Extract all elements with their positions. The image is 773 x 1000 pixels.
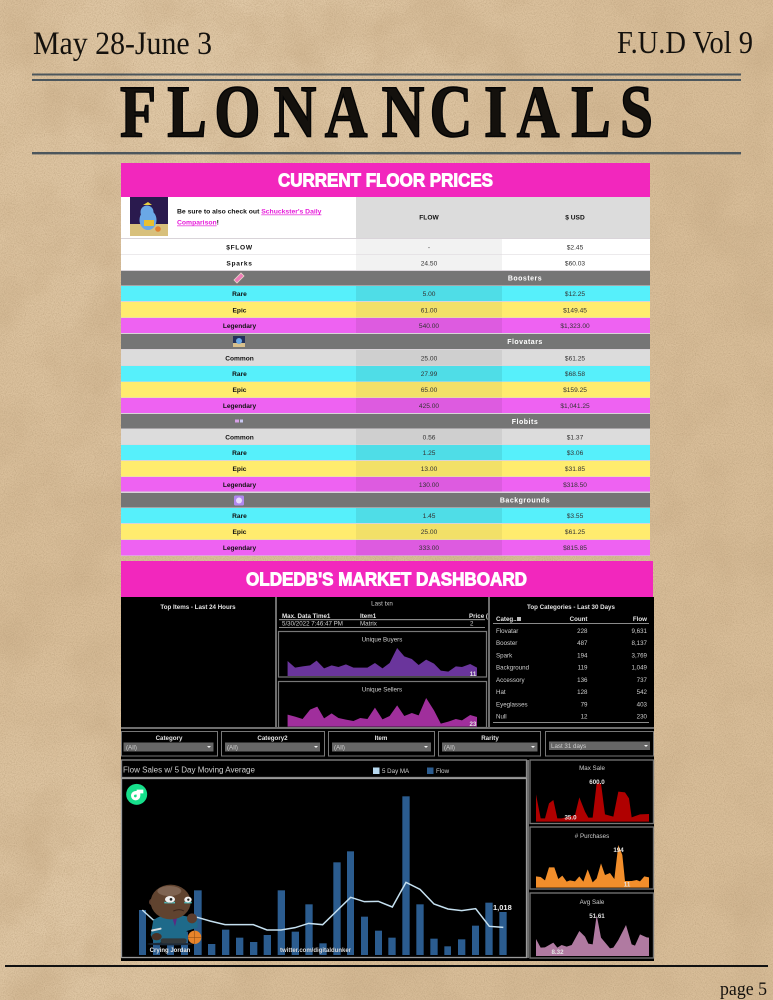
row: sparks: $60.03 — [565, 260, 585, 268]
chart: unique buyers: 11 — [470, 671, 477, 678]
intro row with avatar and note: Comparison! — [177, 220, 219, 226]
row: background rare — [121, 508, 650, 523]
intro row with avatar and note: FLOW — [419, 214, 439, 222]
row: flobit legendary: Legendary — [223, 482, 256, 489]
chart: flow sales with moving average — [122, 760, 526, 958]
table: top categories: Top Categories - Last 30 Days — [527, 604, 616, 611]
table: top categories: 542 — [637, 689, 648, 696]
chart: average sale: 8.32 — [551, 949, 564, 956]
filter: item — [328, 732, 434, 756]
row: background epic — [121, 524, 650, 540]
icon: crying jordan character — [147, 885, 201, 945]
row: booster epic: $149.45 — [563, 308, 587, 314]
filter: category: (All) — [126, 744, 137, 752]
chart: unique sellers — [278, 682, 486, 728]
filter: rarity — [438, 732, 540, 756]
row: booster epic: 61.00 — [421, 308, 438, 314]
section: boosters: Boosters — [508, 276, 542, 282]
intro row with avatar and note — [121, 197, 650, 238]
table: top categories: 194 — [577, 652, 588, 660]
row: sparks — [121, 255, 650, 270]
heading: market dashboard — [121, 561, 653, 597]
row: flovatar legendary — [121, 398, 650, 413]
filter: category — [122, 732, 218, 756]
row: booster legendary: 540.00 — [419, 323, 439, 330]
section: backgrounds: Backgrounds — [500, 498, 550, 504]
table: top categories: 8,137 — [632, 640, 648, 647]
table: top categories: 3,769 — [632, 652, 648, 660]
row: flovatar epic: 65.00 — [421, 387, 438, 394]
filter: rarity: (All) — [444, 744, 455, 752]
chart: unique sellers: Unique Sellers — [362, 686, 402, 694]
row: flobit legendary — [121, 477, 650, 492]
chart: purchases: 194 — [613, 847, 624, 854]
row: flobit legendary: 130.00 — [419, 482, 439, 489]
chart: average sale: Avg Sale — [580, 899, 605, 906]
row: flovatar common: 25.00 — [421, 356, 438, 362]
panel: last transaction: 2 — [470, 620, 474, 628]
row: booster rare: 5.00 — [423, 291, 436, 298]
table: top categories: Count — [570, 616, 588, 623]
row: flobit epic: $31.85 — [565, 466, 585, 473]
table: top categories: 12 — [581, 714, 588, 720]
masthead bottom rule — [32, 152, 741, 154]
chart: flow sales with moving average: Flow Sales w/ 5 Day Moving Average — [123, 766, 255, 774]
filter: date range: Last 31 days — [551, 743, 586, 750]
panel: top items: Top Items - Last 24 Hours — [160, 604, 236, 611]
row: background rare: 1.45 — [423, 513, 436, 520]
row: flovatar legendary: Legendary — [223, 403, 256, 410]
panel: last transaction: Item1 — [360, 613, 377, 620]
icon: flovatar avatar — [130, 197, 168, 236]
row: booster rare: $12.25 — [565, 291, 585, 298]
row: flobit rare: Rare — [232, 450, 247, 457]
chart: purchases: 11 — [624, 882, 631, 888]
bars — [139, 796, 507, 955]
table: top categories: Booster — [496, 640, 517, 647]
masthead volume: F.U.D Vol 9 — [617, 24, 753, 60]
table: top categories: 230 — [637, 714, 648, 720]
filter: item: Item — [375, 735, 388, 742]
row: flovatar rare: 27.99 — [421, 371, 438, 378]
row: background rare: $3.55 — [567, 513, 584, 520]
chart caption: twitter handle: twitter.com/digitaldunker — [280, 948, 352, 954]
filter: category2: Category2 — [257, 735, 288, 742]
row: flobit epic — [121, 461, 650, 476]
row: flobit common: 0.56 — [423, 434, 436, 442]
row: flovatar rare — [121, 366, 650, 382]
row: background legendary: $815.85 — [563, 545, 587, 552]
row: flobit rare: 1.25 — [423, 450, 436, 457]
chart: average sale — [530, 893, 654, 958]
section: flovatars — [121, 334, 650, 349]
masthead top double rule — [32, 74, 741, 81]
table: top categories: 1,049 — [632, 664, 648, 672]
legend — [373, 768, 450, 775]
chart: unique sellers: 23 — [470, 721, 477, 728]
row: flobit epic: Epic — [233, 466, 247, 473]
row: sparks: Sparks — [226, 260, 253, 268]
row: background legendary: 333.00 — [419, 545, 439, 552]
panel: last transaction: Matrix — [360, 620, 378, 628]
row: flow token: - — [428, 244, 430, 252]
intro row with avatar and note: Be sure to also check out Schuckster's Daily — [177, 208, 322, 216]
row: flovatar common: Common — [225, 356, 254, 362]
moving average line — [142, 882, 503, 930]
table: top categories: 79 — [581, 702, 588, 708]
filter: rarity: Rarity — [481, 735, 499, 742]
chart: unique buyers: Unique Buyers — [362, 636, 402, 644]
row: booster epic: Epic — [233, 308, 247, 314]
row: sparks: 24.50 — [421, 260, 438, 268]
row: flovatar rare: $68.58 — [565, 371, 585, 378]
filter: category2 — [222, 732, 324, 756]
row: background epic: Epic — [233, 529, 247, 536]
row: background legendary — [121, 540, 650, 556]
footer rule — [5, 965, 768, 967]
panel: market dashboard — [121, 597, 654, 961]
table: top categories: 119 — [578, 664, 588, 672]
chart caption: crying jordan: Crying Jordan — [150, 948, 191, 954]
legend: Flow — [436, 768, 450, 775]
row: flovatar epic: $159.25 — [563, 387, 587, 394]
panel: last transaction: 5/30/2022 7:46:47 PM — [282, 620, 343, 628]
section: backgrounds — [121, 493, 650, 508]
heading: current floor prices: CURRENT FLOOR PRICES — [278, 170, 493, 190]
row: flobit common: Common — [225, 434, 254, 442]
table: top categories: Spark — [496, 652, 513, 660]
row: background legendary: Legendary — [223, 545, 256, 552]
row: booster legendary: Legendary — [223, 323, 256, 330]
chart: unique buyers — [278, 632, 486, 678]
divider between main chart and side charts — [527, 760, 529, 958]
legend: 5 Day MA — [382, 768, 410, 775]
table: top categories: 9,631 — [632, 628, 648, 635]
row: flow token: $2.45 — [567, 244, 584, 252]
section: flobits — [121, 414, 650, 428]
table: top categories: Categ.. — [496, 616, 517, 623]
chart: max sale: 600.0 — [589, 779, 605, 786]
chart: average sale: 51.61 — [589, 913, 605, 920]
table: top categories: 136 — [577, 677, 588, 684]
panel: last transaction: Max. Data Time1 — [282, 613, 331, 620]
dashboard dividers — [121, 597, 654, 729]
row: flovatar legendary: 425.00 — [419, 403, 439, 410]
title: FLONANCIALS — [120, 71, 653, 153]
row: flobit common: $1.37 — [567, 434, 584, 442]
row: flobit common — [121, 429, 650, 444]
table: top categories: 403 — [637, 702, 648, 708]
heading: market dashboard: OLDEDB'S MARKET DASHBOARD — [246, 570, 527, 590]
panel: last transaction: Price ( — [469, 613, 489, 620]
row: flovatar common — [121, 350, 650, 366]
filter: item: (All) — [334, 744, 345, 752]
table: top categories: Hat — [496, 689, 506, 696]
section: flovatars: Flovatars — [507, 339, 543, 346]
page number: page 5 — [720, 979, 767, 1000]
row: flovatar epic: Epic — [233, 387, 247, 394]
row: flow token — [121, 239, 650, 254]
chart: purchases — [530, 827, 654, 889]
row: background rare: Rare — [232, 513, 247, 520]
panel: last transaction — [279, 600, 489, 628]
row: flobit epic: 13.00 — [421, 466, 438, 473]
table: top categories: Null — [496, 714, 507, 720]
row: background epic: $61.25 — [565, 529, 585, 536]
row: flovatar common: $61.25 — [565, 356, 585, 362]
table: top categories: 737 — [637, 677, 648, 684]
row: flobit rare: $3.06 — [567, 450, 584, 457]
row: booster rare: Rare — [232, 291, 247, 298]
icon: flow logo — [126, 784, 147, 805]
table: top categories: Accessory — [496, 677, 525, 684]
panel: current floor prices — [121, 163, 650, 556]
table: top categories: 487 — [577, 640, 588, 647]
chart: max sale — [530, 760, 654, 824]
filter: category: Category — [156, 735, 183, 742]
chart: flow sales with moving average: 1,018 — [493, 903, 512, 912]
row: flovatar epic — [121, 382, 650, 398]
intro row with avatar and note: $ USD — [565, 214, 585, 222]
table: top categories: Eyeglasses — [496, 702, 528, 708]
row: flow token: $FLOW — [226, 244, 253, 252]
heading: current floor prices — [121, 163, 650, 197]
table: top categories: Flovatar — [496, 628, 518, 635]
row: booster legendary: $1,323.00 — [560, 323, 590, 330]
row: background epic: 25.00 — [421, 529, 438, 536]
filter: category2: (All) — [227, 744, 238, 752]
table: top categories — [493, 604, 649, 723]
row: booster epic — [121, 302, 650, 318]
table: top categories: Background — [496, 664, 530, 672]
chart: max sale: Max Sale — [579, 765, 605, 772]
filter: date range — [546, 732, 654, 756]
masthead date: May 28-June 3 — [33, 26, 212, 62]
section: flobits: Flobits — [512, 419, 538, 426]
row: flovatar rare: Rare — [232, 371, 247, 378]
row: flovatar legendary: $1,041.25 — [560, 403, 590, 410]
section: boosters — [121, 271, 650, 286]
row: flobit legendary: $318.50 — [563, 482, 587, 489]
panel: last transaction: Last txn — [371, 600, 393, 608]
row: booster legendary — [121, 318, 650, 333]
row: booster rare — [121, 286, 650, 301]
table: top categories: 128 — [577, 689, 588, 696]
table: top categories: 228 — [577, 628, 588, 635]
table: top categories: Flow — [633, 616, 647, 623]
row: flobit rare — [121, 445, 650, 460]
chart: purchases: # Purchases — [575, 833, 609, 840]
chart: max sale: 35.0 — [564, 814, 577, 822]
